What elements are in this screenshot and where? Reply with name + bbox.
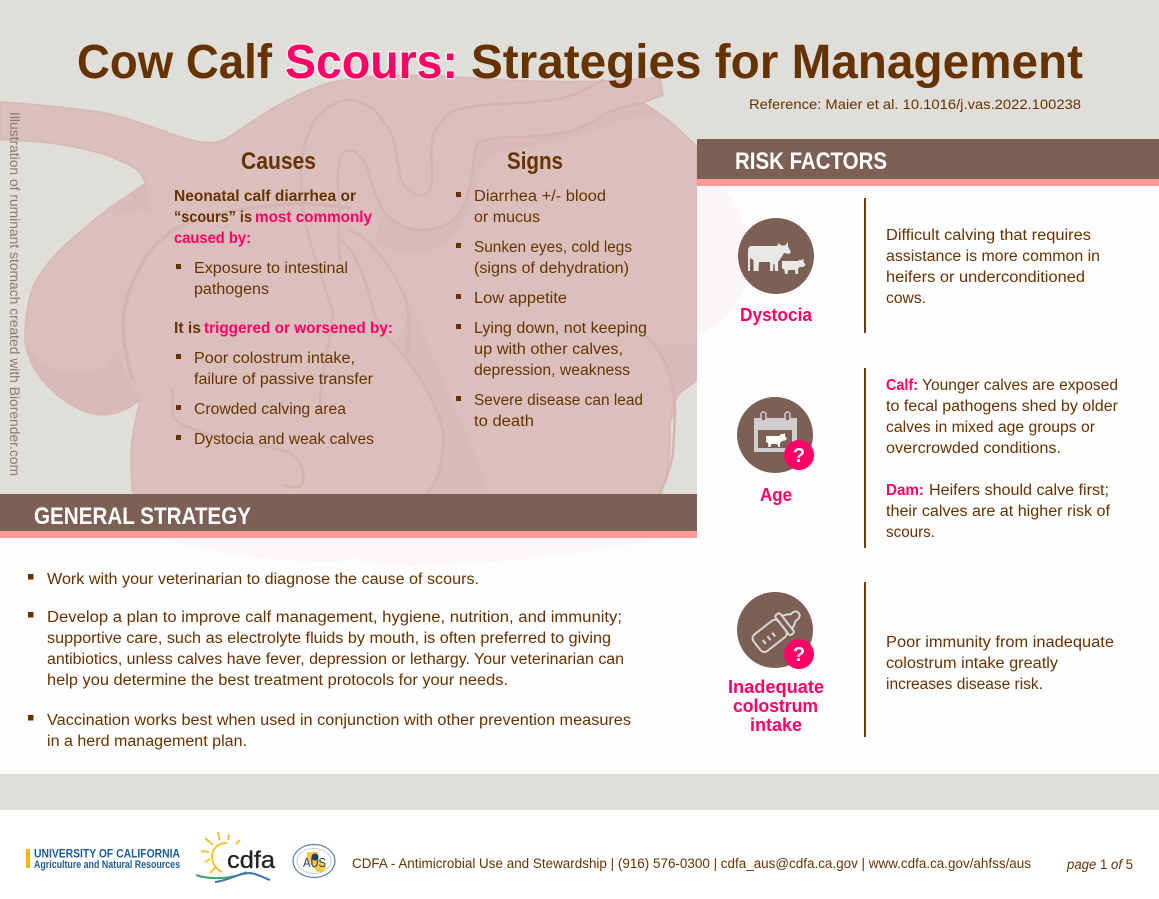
text: dystocia: assistance is more common in bbox=[886, 248, 1100, 265]
icon: baby bottle bbox=[737, 592, 814, 669]
heading: causes: Causes bbox=[241, 148, 316, 175]
text: age: Dam: bbox=[886, 482, 924, 499]
title: Strategies for Management bbox=[471, 36, 1083, 89]
list: signs: up with other calves, bbox=[474, 341, 623, 358]
text: triggers heading: triggered or worsened by: bbox=[204, 320, 393, 337]
list: signs: Sunken eyes, cold legs bbox=[474, 239, 632, 256]
logo: University of California: UNIVERSITY OF CALIFORNIA bbox=[34, 848, 180, 860]
text: triggers heading: It is bbox=[174, 320, 201, 337]
label: inadequate colostrum intake: intake bbox=[750, 715, 802, 735]
text: age: Younger calves are exposed bbox=[922, 377, 1118, 394]
strategy item: plan: supportive care, such as electrolyte fluids by mouth, is often preferred to giving bbox=[47, 630, 611, 647]
label: inadequate colostrum intake bbox=[728, 677, 824, 735]
list: triggers: Crowded calving area bbox=[194, 401, 346, 418]
title bbox=[77, 36, 1083, 89]
title: Scours: bbox=[285, 36, 458, 89]
strategy item: plan: Develop a plan to improve calf management, hygiene, nutrition, and immunity; bbox=[47, 609, 622, 626]
risk: age bbox=[737, 368, 1118, 548]
logo: cdfa bbox=[196, 832, 276, 882]
list: signs bbox=[456, 188, 647, 430]
label: dystocia: Dystocia bbox=[740, 305, 813, 325]
list: signs: Lying down, not keeping bbox=[474, 320, 647, 337]
text: age: their calves are at higher risk of bbox=[886, 503, 1111, 520]
list: signs: Severe disease can lead bbox=[474, 392, 643, 409]
logo: cdfa: cdfa bbox=[227, 847, 276, 874]
logo: University of California bbox=[26, 848, 180, 871]
logo: AUS bbox=[293, 844, 335, 878]
list: triggers bbox=[176, 350, 374, 448]
text: colostrum: colostrum intake greatly bbox=[886, 655, 1058, 672]
illustration: ruminant stomach background bbox=[0, 75, 697, 496]
list: signs: or mucus bbox=[474, 209, 540, 226]
text: causes intro: most commonly bbox=[255, 209, 372, 226]
text: age: overcrowded conditions. bbox=[886, 440, 1061, 457]
list: signs: depression, weakness bbox=[474, 362, 630, 379]
text: dystocia: Difficult calving that requires bbox=[886, 227, 1091, 244]
panel: general strategy bbox=[0, 494, 697, 774]
text: causes intro: “scours” is bbox=[174, 209, 252, 226]
text: age: calves in mixed age groups or bbox=[886, 419, 1095, 436]
illustration credit: Illustration of ruminant stomach created with Biorender.com bbox=[7, 112, 22, 476]
strategy item: plan: help you determine the best treatment protocols for your needs. bbox=[47, 672, 508, 689]
text: dystocia: cows. bbox=[886, 290, 926, 307]
text: colostrum: Poor immunity from inadequate bbox=[886, 634, 1114, 651]
strategy item: plan: antibiotics, unless calves have fever, depression or lethargy. Your veterinarian can bbox=[47, 651, 624, 668]
text: causes intro bbox=[174, 188, 372, 247]
list: pathogens: pathogens bbox=[194, 281, 269, 298]
list: signs: (signs of dehydration) bbox=[474, 260, 629, 277]
text: age: Calf: bbox=[886, 377, 918, 394]
text: colostrum bbox=[886, 634, 1114, 693]
title: Cow Calf bbox=[77, 36, 273, 89]
heading bar: general strategy bbox=[0, 494, 697, 538]
logo: University of California: Agriculture and Natural Resources bbox=[34, 859, 180, 871]
text: dystocia bbox=[886, 227, 1100, 307]
icon: cow and calf bbox=[738, 218, 814, 294]
icon: calendar with calf: ? bbox=[793, 445, 805, 467]
list: signs: Diarrhea +/- blood bbox=[474, 188, 606, 205]
icon: calendar with calf bbox=[737, 397, 814, 473]
heading bar: general strategy: GENERAL STRATEGY bbox=[34, 503, 251, 530]
reference citation: Reference: Maier et al. 10.1016/j.vas.2022.100238 bbox=[749, 96, 1081, 112]
heading bar: risk factors: RISK FACTORS bbox=[735, 148, 887, 175]
logo: AUS: AUS bbox=[303, 855, 326, 870]
list: triggers: Poor colostrum intake, bbox=[194, 350, 355, 367]
footer contact line: CDFA - Antimicrobial Use and Stewardship | (916) 576-0300 | cdfa_aus@cdfa.ca.gov | www.cdfa.ca.gov/ahfss/aus bbox=[352, 856, 1031, 871]
strategy item: vaccination bbox=[28, 712, 631, 750]
text: causes intro: caused by: bbox=[174, 230, 251, 247]
panel: causes bbox=[174, 148, 393, 448]
strategy item: vaccination: Vaccination works best when used in conjunction with other prevention measures bbox=[47, 712, 631, 729]
heading: signs: Signs bbox=[507, 148, 563, 175]
text: age bbox=[886, 377, 1118, 541]
list: signs: to death bbox=[474, 413, 534, 430]
label: age: Age bbox=[760, 485, 792, 505]
text: age: Heifers should calve first; bbox=[929, 482, 1109, 499]
risk: inadequate colostrum intake bbox=[728, 582, 1114, 737]
strategy item: vaccination: in a herd management plan. bbox=[47, 733, 247, 750]
text: age: scours. bbox=[886, 524, 935, 541]
list: pathogens bbox=[176, 260, 348, 298]
label: inadequate colostrum intake: colostrum bbox=[733, 696, 818, 716]
text: age: to fecal pathogens shed by older bbox=[886, 398, 1118, 415]
strategy item: plan bbox=[28, 609, 624, 689]
label: inadequate colostrum intake: Inadequate bbox=[728, 677, 824, 697]
risk: dystocia bbox=[738, 198, 1100, 333]
icon: baby bottle: ? bbox=[793, 644, 805, 666]
list: pathogens: Exposure to intestinal bbox=[194, 260, 348, 277]
list: signs: Low appetite bbox=[474, 290, 567, 307]
heading bar: risk factors bbox=[697, 139, 1159, 186]
text: colostrum: increases disease risk. bbox=[886, 676, 1043, 693]
strategy item: diagnose: Work with your veterinarian to diagnose the cause of scours. bbox=[47, 571, 479, 588]
text: dystocia: heifers or underconditioned bbox=[886, 269, 1085, 286]
list: triggers: Dystocia and weak calves bbox=[194, 431, 374, 448]
text: causes intro: Neonatal calf diarrhea or bbox=[174, 188, 356, 205]
list: triggers: failure of passive transfer bbox=[194, 371, 373, 388]
panel: signs bbox=[456, 148, 647, 430]
page number: page 1 of 5 bbox=[1066, 857, 1133, 872]
